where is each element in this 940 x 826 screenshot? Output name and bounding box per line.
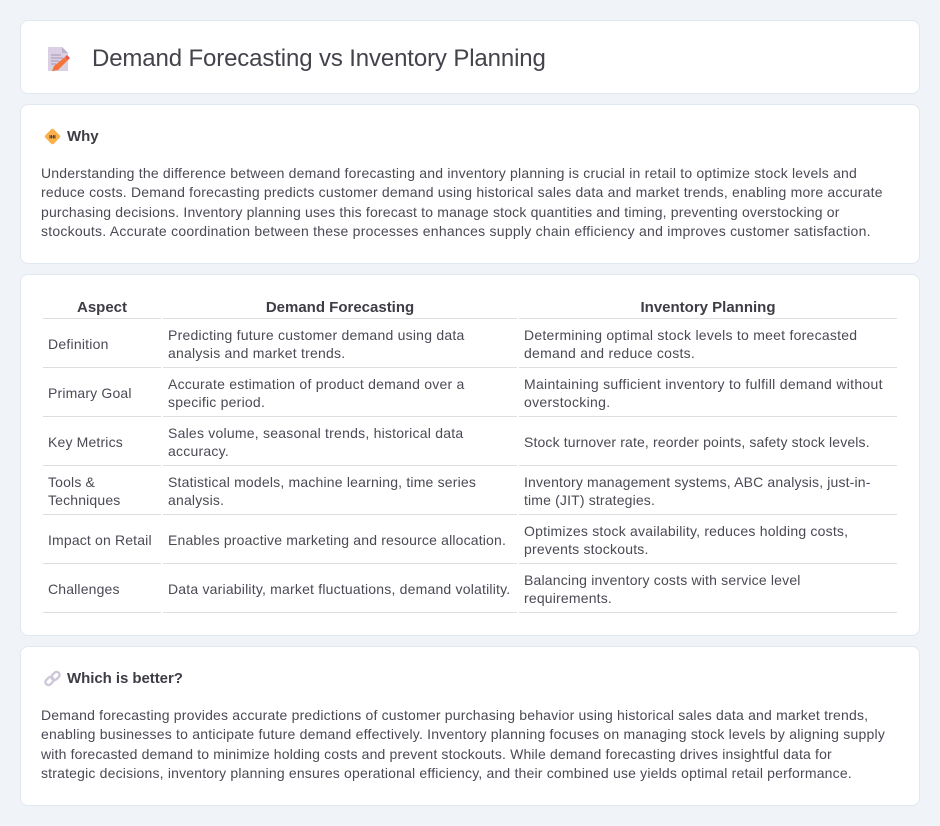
row: definition: analysis and market trends. xyxy=(168,345,345,361)
row: key metrics: Sales volume, seasonal trends, historical data xyxy=(168,425,463,441)
row: key metrics: accuracy. xyxy=(168,443,229,459)
text block: which is better xyxy=(41,707,885,781)
row: challenges: Challenges xyxy=(48,581,120,597)
text block: why: reduce costs. Demand forecasting predicts customer demand using historical sales data and market trends, enabling more accurate xyxy=(41,184,883,200)
table header: Aspect xyxy=(77,299,127,316)
row: challenges: Data variability, market fluctuations, demand volatility. xyxy=(168,581,510,597)
row: tools and techniques: time (JIT) strategies. xyxy=(524,492,655,508)
row: key metrics xyxy=(43,425,897,466)
text block: which is better: enabling businesses to anticipate future demand effectively. Inventory planning focuses on managing stock levels by aligning supply xyxy=(41,726,885,742)
row: tools and techniques: Inventory management systems, ABC analysis, just-in- xyxy=(524,474,871,490)
row: impact on retail: Optimizes stock availability, reduces holding costs, xyxy=(524,523,848,539)
icon: warning diamond xyxy=(44,128,60,144)
panel: why xyxy=(20,104,920,264)
heading: why: Why xyxy=(67,128,99,145)
text block: which is better: strategic decisions, inventory planning ensures operational efficiency, and their combined use yields optimal retail performance. xyxy=(41,765,852,781)
text block: which is better: Demand forecasting provides accurate predictions of customer purchasing behavior using historical sales data and market trends, xyxy=(41,707,868,723)
text block: why: purchasing decisions. Inventory planning uses this forecast to manage stock quantities and timing, preventing overstocking or xyxy=(41,204,840,220)
row: impact on retail: Impact on Retail xyxy=(48,532,152,548)
title: Demand Forecasting vs Inventory Planning xyxy=(92,45,546,72)
heading: which is better: Which is better? xyxy=(67,670,183,687)
row: definition: Determining optimal stock levels to meet forecasted xyxy=(524,327,857,343)
row: key metrics: Stock turnover rate, reorder points, safety stock levels. xyxy=(524,434,870,450)
header card xyxy=(20,20,920,94)
text block: why: Understanding the difference between demand forecasting and inventory planning is crucial in retail to optimize stock levels and xyxy=(41,165,857,181)
row: challenges: requirements. xyxy=(524,590,612,606)
row: primary goal: specific period. xyxy=(168,394,265,410)
row: definition: Predicting future customer demand using data xyxy=(168,327,465,343)
row: definition xyxy=(43,327,897,368)
icon: document with pencil xyxy=(48,47,70,71)
row: primary goal: Primary Goal xyxy=(48,385,132,401)
row: tools and techniques: Techniques xyxy=(48,492,120,508)
panel: which is better xyxy=(20,646,920,806)
row: tools and techniques: Statistical models, machine learning, time series xyxy=(168,474,476,490)
row: impact on retail: prevents stockouts. xyxy=(524,541,649,557)
row: primary goal: Maintaining sufficient inventory to fulfill demand without xyxy=(524,376,883,392)
text block: why: stockouts. Accurate coordination between these processes enhances supply chain efficiency and improves customer satisfaction. xyxy=(41,223,871,239)
row: impact on retail xyxy=(43,523,897,564)
row: tools and techniques: analysis. xyxy=(168,492,224,508)
row: primary goal: overstocking. xyxy=(524,394,610,410)
row: definition: Definition xyxy=(48,336,109,352)
row: challenges xyxy=(43,572,897,613)
row: primary goal: Accurate estimation of product demand over a xyxy=(168,376,464,392)
table header: Inventory Planning xyxy=(640,299,776,316)
row: challenges: Balancing inventory costs with service level xyxy=(524,572,801,588)
row: definition: demand and reduce costs. xyxy=(524,345,695,361)
text block: which is better: with forecasted demand to minimize holding costs and prevent stockouts. While demand forecasting drives insightful data for xyxy=(41,746,832,762)
row: tools and techniques: Tools & xyxy=(48,474,95,490)
row: primary goal xyxy=(43,376,897,417)
panel: comparison table xyxy=(20,274,920,636)
text block: why xyxy=(41,165,883,239)
row: tools and techniques xyxy=(43,474,897,515)
row: key metrics: Key Metrics xyxy=(48,434,123,450)
table header: Demand Forecasting xyxy=(266,299,414,316)
icon: chain link xyxy=(44,670,61,686)
table header xyxy=(43,299,897,319)
row: impact on retail: Enables proactive marketing and resource allocation. xyxy=(168,532,506,548)
